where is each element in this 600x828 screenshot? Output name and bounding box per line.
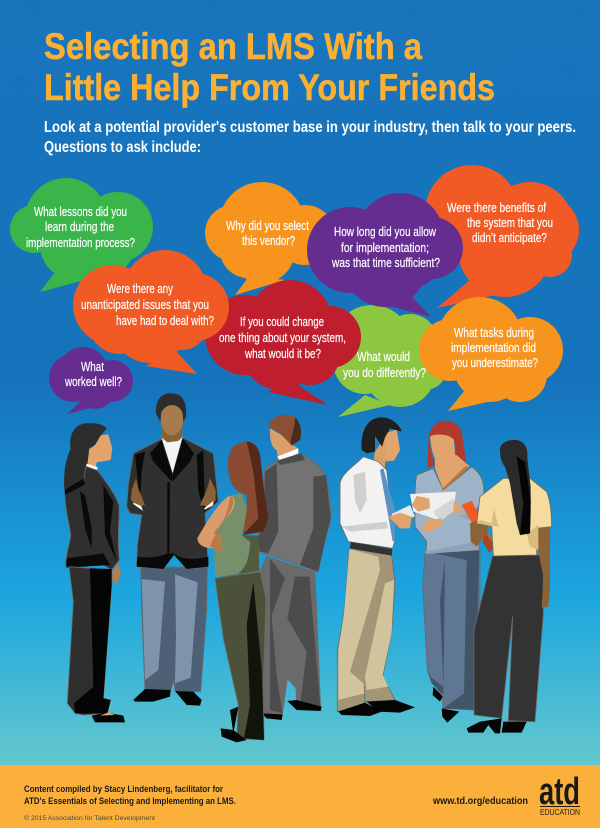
text: ?: [440, 89, 455, 116]
person: man in white shirt with tie: [337, 417, 415, 716]
speech bubble: implementation time: How long did you allow: [334, 224, 436, 239]
text: ?: [15, 154, 30, 181]
speech bubble: underestimated tasks: implementation did: [451, 340, 536, 355]
speech bubble: do differently: [332, 305, 447, 417]
speech bubble: unanticipated benefits: the system that you: [467, 215, 553, 230]
speech bubble: change one thing: [205, 280, 361, 405]
speech bubble: underestimated tasks: What tasks during: [454, 325, 534, 340]
figures: left group of four people: [64, 393, 331, 742]
person: woman in blue sweater: [410, 421, 484, 723]
speech bubble: why this vendor: Why did you select: [226, 218, 309, 233]
text: ?: [570, 4, 585, 31]
speech bubble: what worked well: What: [81, 359, 104, 374]
text: ?: [250, 158, 262, 180]
speech bubble: lessons learned: learn during the: [45, 219, 114, 234]
text: what would you do differently: What would: [357, 349, 410, 364]
text: ?: [510, 90, 523, 115]
footer credit: ATD's Essentials of Selecting and Implementing an LMS.: [24, 796, 236, 807]
intro text: Questions to ask include:: [44, 139, 201, 156]
speech bubble: change one thing: one thing about your system,: [219, 330, 346, 345]
speech bubble: why this vendor: this vendor?: [242, 233, 295, 248]
text: ?: [8, 70, 29, 108]
speech bubble: underestimated tasks: you underestimate?: [452, 355, 538, 370]
title: Little Help From Your Friends: [44, 67, 495, 108]
person: man in grey suit: [253, 415, 331, 720]
text: ?: [490, 5, 502, 27]
speech bubble: lessons learned: What lessons did you: [34, 204, 127, 219]
text: ?: [160, 180, 173, 205]
text: ?: [110, 1, 126, 31]
speech bubble: change one thing: what would it be?: [244, 346, 321, 361]
text: ?: [530, 9, 545, 36]
person: woman in black suit: [64, 423, 125, 722]
footer credit: [24, 784, 236, 807]
website url: www.td.org/education: [432, 796, 528, 807]
speech bubble: lessons learned: [10, 178, 153, 292]
text: ?: [150, 105, 163, 130]
speech bubble: implementation time: [307, 193, 463, 317]
figures: right group of three people: [337, 417, 552, 733]
speech bubble: unanticipated benefits: [425, 165, 579, 308]
speech bubble: unanticipated issues: [73, 250, 229, 374]
text: ?: [330, 0, 343, 25]
speech bubble: unanticipated benefits: Were there benefits of: [447, 200, 546, 215]
text: ?: [570, 154, 585, 181]
intro text: [44, 119, 576, 156]
speech bubble: what worked well: [49, 347, 133, 414]
text: what would you do differently: [343, 349, 426, 380]
footer band: [0, 765, 600, 828]
person: woman in yellow shirt holding book: [462, 440, 552, 733]
person: man in black blazer: [127, 393, 218, 706]
speech bubble: underestimated tasks: [419, 297, 563, 411]
text: what would you do differently: you do differently?: [343, 365, 426, 380]
speech bubble: unanticipated benefits: didn’t anticipate?: [472, 230, 547, 245]
speech bubble: implementation time: was that time sufficient?: [331, 255, 440, 270]
copyright: © 2015 Association for Talent Development: [24, 814, 155, 822]
speech bubble: change one thing: If you could change: [240, 314, 324, 329]
speech bubble: what worked well: worked well?: [64, 374, 122, 389]
speech bubble: why this vendor: [205, 182, 335, 295]
ATD Education logo: atd: [539, 771, 580, 813]
text: ?: [560, 59, 578, 92]
footer credit: Content compiled by Stacy Lindenberg, facilitator for: [24, 784, 223, 795]
text: ?: [390, 165, 403, 190]
speech bubble: unanticipated issues: Were there any: [107, 281, 173, 296]
ATD Education logo: [539, 771, 580, 817]
speech bubble: unanticipated issues: unanticipated issues that you: [81, 297, 209, 312]
text: ?: [510, 34, 525, 61]
speech bubble: lessons learned: implementation process?: [26, 235, 135, 250]
person: woman in green top: [197, 442, 268, 742]
title: [44, 26, 495, 108]
speech bubble: implementation time: for implementation;: [341, 240, 429, 255]
text: ?: [85, 154, 100, 181]
title: Selecting an LMS With a: [44, 26, 422, 67]
speech bubble: unanticipated issues: have had to deal with?: [116, 313, 214, 328]
ATD Education logo: EDUCATION: [540, 808, 580, 817]
